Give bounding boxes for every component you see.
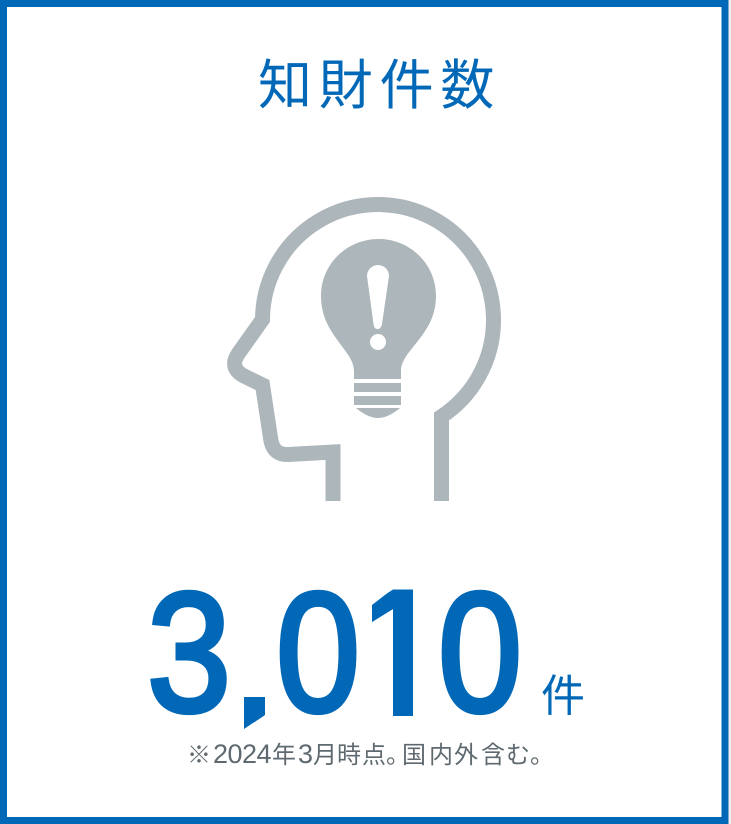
big number: 0	[438, 558, 522, 748]
unit: 件	[541, 672, 585, 721]
footnote: 月時点。国内外含む。	[313, 742, 554, 769]
footnote: 2024	[213, 739, 272, 769]
head outline	[235, 205, 493, 501]
icon: head with light bulb	[235, 205, 493, 501]
footnote: ※	[187, 742, 211, 769]
big number: 1	[357, 560, 441, 750]
big number: 3	[147, 558, 231, 748]
title: 知財件数	[258, 56, 501, 116]
big number: ,	[237, 598, 273, 744]
light bulb	[321, 239, 436, 379]
bulb base bands	[354, 383, 401, 418]
big number: 0	[276, 558, 360, 748]
exclamation mark	[367, 265, 389, 329]
big number	[150, 590, 518, 729]
footnote: 年	[272, 742, 296, 769]
footnote: 3	[298, 739, 313, 769]
